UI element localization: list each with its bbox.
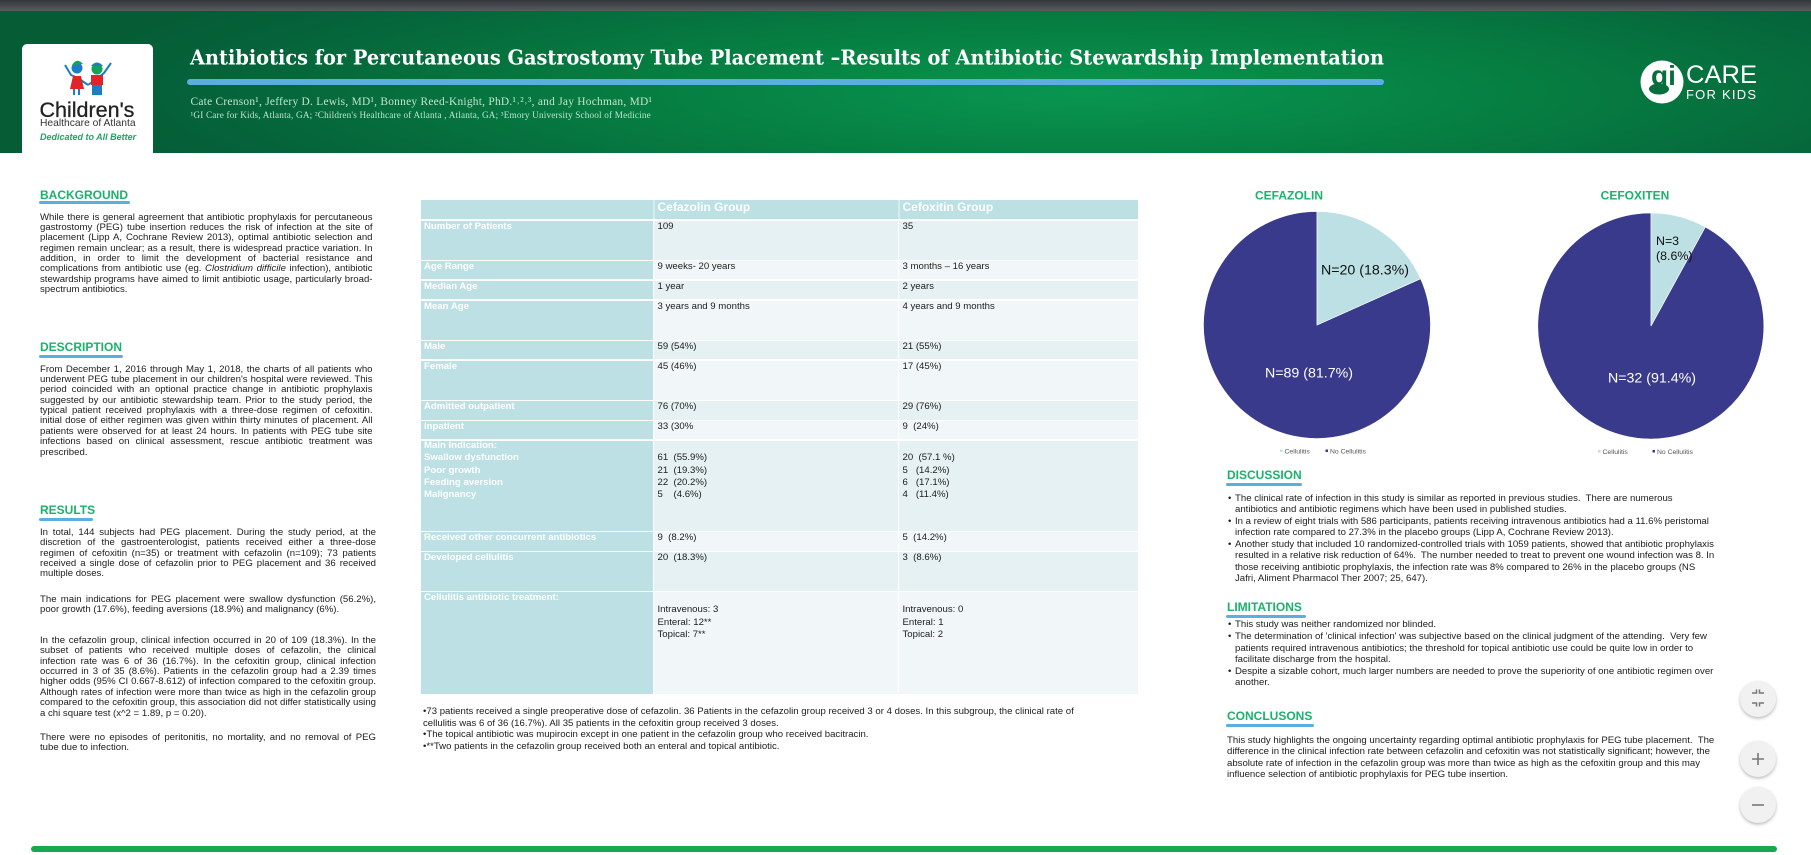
- row: cellulitis antibiotic treatment: Topical: 2: [902, 629, 943, 640]
- logo: GI Care for Kids: [1640, 60, 1757, 104]
- chart title: cefazolin: CEFAZOLIN: [1255, 188, 1323, 202]
- row: developed cellulitis: 3 (8.6%): [902, 552, 941, 562]
- row: inpatient: [421, 420, 1138, 439]
- heading: discussion: DISCUSSION: [1227, 468, 1302, 482]
- heading: results: RESULTS: [40, 503, 95, 517]
- text: limitations bullets: Despite a sizable cohort, much larger numbers are needed to prove the superiority of one antibiotic regimen over: [1235, 666, 1713, 677]
- row: developed cellulitis: 20 (18.3%): [658, 552, 707, 562]
- text: conclusions: This study highlights the ongoing uncertainty regarding optimal antibiotic prophylaxis for PEG tube placement. The: [1227, 735, 1714, 746]
- row: admitted outpatient: 76 (70%): [658, 401, 696, 412]
- panel: discussion: •: [1228, 493, 1231, 504]
- text: limitations bullets: another.: [1235, 677, 1270, 688]
- text: conclusions: influence selection of antibiotic prophylaxis for PEG tube insertion.: [1227, 769, 1508, 780]
- panel: discussion: •: [1228, 539, 1231, 550]
- slice label: cellulitis: N=3: [1656, 234, 1679, 248]
- slice label: no cellulitis: N=89 (81.7%): [1265, 366, 1353, 382]
- text: discussion bullets: The clinical rate of infection in this study is similar as reported in previous studies. There are numerous: [1235, 493, 1673, 504]
- text: discussion bullets: resulted in a relative risk reduction of 64%. The number needed to treat to prevent one wound infection was 8. In: [1235, 550, 1714, 561]
- legend: Cellulitis: [1602, 449, 1628, 456]
- chart: cefazolin pie: [1204, 188, 1430, 456]
- pie slice: cellulitis: [1651, 213, 1705, 326]
- panel: limitations: [1226, 600, 1714, 688]
- header banner: [0, 11, 1811, 153]
- authors: Cate Crenson¹, Jeffery D. Lewis, MD¹, Bonney Reed-Knight, PhD.¹˒²˒³, and Jay Hochman, MD¹: [190, 96, 652, 108]
- row: admitted outpatient: 29 (76%): [902, 401, 941, 412]
- text: results paragraph 1: multiple doses.: [40, 568, 104, 579]
- top dark browser bar: [0, 0, 1811, 11]
- chart: cefoxitin pie: [1538, 188, 1764, 456]
- table header row: Cefoxitin Group: [902, 200, 993, 214]
- text: limitations bullets: patients required intravenous antibiotics; the threshold for topical antibiotic use could be quite low in order to: [1235, 643, 1693, 654]
- row: male: 59 (54%): [658, 340, 696, 352]
- row: number of patients: 35: [902, 220, 913, 232]
- row: number of patients: Number of Patients: [424, 220, 512, 232]
- panel: limitations: •: [1228, 619, 1231, 630]
- table footnotes: •The topical antibiotic was mupirocin except in one patient in the cefazolin group who received bacitracin.: [423, 729, 868, 740]
- text: discussion bullets: In a review of eight trials with 586 participants, patients receiving intravenous antibiotics had a 11.6% peristomal: [1235, 516, 1709, 527]
- text: discussion bullets: infection rate compared to 27.3% in the placebo groups (Lipp A, Cochrane Review 2013).: [1235, 527, 1614, 538]
- text: discussion bullets: antibiotics and antibiotic regimens which have been used in published studies.: [1235, 504, 1567, 515]
- legend: Cellulitis: [1284, 448, 1310, 456]
- text: results paragraph 2: [40, 594, 376, 615]
- heading: limitations: LIMITATIONS: [1227, 600, 1302, 614]
- row: main indication: 5 (4.6%): [658, 489, 702, 500]
- title underline: [187, 79, 1384, 85]
- row: main indication: 6 (17.1%): [902, 477, 949, 488]
- table footnotes: [423, 706, 1074, 752]
- row: median age: 2 years: [902, 280, 934, 292]
- row: age range: 3 months – 16 years: [902, 261, 989, 272]
- text: discussion bullets: those receiving antibiotic prophylaxis, the infection rate was 8% compared to 26% in the placebo groups (NS: [1235, 562, 1695, 573]
- row: cellulitis antibiotic treatment: Intravenous: 3: [658, 604, 718, 615]
- row: other concurrent antibiotics: Received other concurrent antibiotics: [424, 532, 596, 543]
- panel: results: [39, 503, 376, 753]
- logo: GI Care for Kids: gi: [1651, 60, 1676, 91]
- row: mean age: Mean Age: [424, 300, 469, 312]
- row: developed cellulitis: Developed cellulitis: [424, 552, 514, 562]
- row: developed cellulitis: [421, 552, 1138, 591]
- table header row: [421, 200, 1138, 218]
- pie slice: no cellulitis: [1538, 213, 1764, 439]
- row: main indication: 5 (14.2%): [902, 464, 949, 476]
- logo wordmark: Children's: [40, 98, 134, 122]
- panel: discussion: [1226, 468, 1714, 584]
- row: main indication: 22 (20.2%): [658, 477, 707, 488]
- logo: GI Care for Kids: CARE: [1686, 61, 1757, 89]
- row: main indication: 4 (11.4%): [902, 489, 949, 500]
- row: main indication: 20 (57.1 %): [902, 452, 955, 462]
- row: main indication: Poor growth: [424, 464, 480, 476]
- text: limitations bullets: [1228, 619, 1714, 688]
- chart title: cefoxiten: CEFOXITEN: [1601, 188, 1669, 202]
- row: cellulitis antibiotic treatment: Cellulitis antibiotic treatment:: [424, 592, 559, 603]
- row: inpatient: Inpatient: [424, 420, 464, 432]
- logo: GI Care for Kids: FOR KIDS: [1686, 87, 1756, 102]
- heading: conclusions: CONCLUSONS: [1227, 709, 1312, 723]
- row: main indication: Malignancy: [424, 489, 476, 500]
- text: discussion bullets: Another study that included 10 randomized-controlled trials with 1059 patients, showed that antibiotic prophylaxis: [1235, 539, 1714, 550]
- row: female: [421, 360, 1138, 400]
- table: patient characteristics: [421, 200, 1138, 694]
- row: main indication: 61 (55.9%): [658, 452, 707, 462]
- icon: two children holding hands: [64, 60, 112, 95]
- row: cellulitis antibiotic treatment: [421, 592, 1138, 694]
- row: mean age: [421, 300, 1138, 340]
- logo tagline: Dedicated to All Better: [40, 132, 136, 142]
- text: description: [40, 364, 372, 458]
- row: main indication: Swallow dysfunction: [424, 452, 519, 462]
- logo subline: Healthcare of Atlanta: [40, 118, 136, 129]
- pie slice: cellulitis: [1317, 212, 1421, 325]
- text: conclusions: difference in the clinical infection rate between cefazolin and cefoxitin was not statistically significant; however, the: [1227, 746, 1710, 757]
- legend: No Cellulitis: [1657, 449, 1693, 456]
- text: discussion bullets: [1228, 493, 1714, 584]
- row: median age: [421, 280, 1138, 299]
- row: median age: Median Age: [424, 280, 477, 292]
- panel: limitations: •: [1228, 666, 1231, 677]
- row: male: Male: [424, 340, 445, 352]
- button: zoom in: [1740, 741, 1776, 777]
- slice label: cellulitis: (8.6%): [1656, 249, 1692, 263]
- footer bar: [31, 846, 1777, 852]
- row: age range: [421, 261, 1138, 279]
- row: other concurrent antibiotics: [421, 532, 1138, 551]
- row: inpatient: 33 (30%: [658, 420, 693, 432]
- row: other concurrent antibiotics: 5 (14.2%): [902, 532, 947, 543]
- button: zoom out: [1740, 787, 1776, 823]
- row: male: [421, 340, 1138, 359]
- pie slice: no cellulitis: [1203, 212, 1430, 438]
- text: results paragraph 4: [40, 733, 376, 753]
- row: admitted outpatient: [421, 401, 1138, 420]
- panel: discussion: •: [1228, 516, 1231, 527]
- text: limitations bullets: The determination of 'clinical infection' was subjective based on the clinical judgment of the attending. Very few: [1235, 631, 1707, 642]
- row: main indication: Main Indication:: [424, 440, 497, 451]
- slice label: no cellulitis: N=32 (91.4%): [1608, 370, 1696, 386]
- table header row: Cefazolin Group: [658, 200, 750, 214]
- text: results paragraph 3: [40, 636, 376, 719]
- row: number of patients: 109: [658, 220, 674, 232]
- text: results paragraph 1: [40, 528, 376, 579]
- row: cellulitis antibiotic treatment: Enteral: 12**: [658, 617, 711, 628]
- text: results paragraph 2: poor growth (17.6%), feeding aversions (18.9%) and malignancy (6%).: [40, 604, 339, 615]
- row: main indication: 21 (19.3%): [658, 464, 707, 476]
- row: inpatient: 9 (24%): [902, 420, 939, 432]
- row: female: Female: [424, 360, 457, 372]
- text: results paragraph 4: tube due to infection.: [40, 742, 129, 753]
- text: background: [40, 212, 373, 295]
- table footnotes: •73 patients received a single preoperative dose of cefazolin. 36 Patients in the cefazolin group received 3 or 4 doses. In this subgroup, the clinical rate of: [423, 706, 1074, 717]
- text: results paragraph 3: a chi square test (x^2 = 1.89, p = 0.20).: [40, 708, 207, 719]
- row: other concurrent antibiotics: 9 (8.2%): [658, 532, 696, 543]
- affiliations: ¹GI Care for Kids, Atlanta, GA; ²Children's Healthcare of Atlanta , Atlanta, GA; ³Emory University School of Medicine: [190, 110, 651, 120]
- row: female: 45 (46%): [658, 360, 696, 372]
- slice label: cellulitis: [1656, 234, 1692, 263]
- panel: limitations: •: [1228, 631, 1231, 642]
- text: conclusions: absolute rate of infection in the cefazolin group was more than twice as high as the cefoxitin group and this may: [1227, 758, 1700, 769]
- legend: No Cellulitis: [1330, 448, 1366, 456]
- heading: description: DESCRIPTION: [40, 340, 122, 354]
- row: median age: 1 year: [658, 280, 684, 292]
- text: discussion bullets: Jafri, Aliment Pharmacol Ther 2007; 25, 647).: [1235, 573, 1428, 584]
- row: age range: Age Range: [424, 261, 474, 272]
- panel: description: [39, 340, 372, 458]
- logo: Children's Healthcare of Atlanta: [22, 44, 153, 153]
- row: female: 17 (45%): [902, 360, 941, 372]
- heading: background: BACKGROUND: [40, 188, 128, 202]
- text: limitations bullets: facilitate discharge from the hospital.: [1235, 654, 1391, 665]
- button: fit to screen: [1740, 681, 1776, 717]
- text: description: prescribed.: [40, 447, 87, 458]
- text: conclusions: [1227, 735, 1714, 780]
- table footnotes: •**Two patients in the cefazolin group received both an enteral and topical antibiotic.: [423, 741, 779, 752]
- row: cellulitis antibiotic treatment: Intravenous: 0: [902, 604, 963, 615]
- row: mean age: 4 years and 9 months: [902, 300, 995, 312]
- table footnotes: cellulitis was 6 of 36 (16.7%). All 35 patients in the cefoxitin group received 3 doses.: [423, 718, 779, 729]
- row: age range: 9 weeks- 20 years: [658, 261, 735, 272]
- legend: [1280, 448, 1366, 456]
- row: admitted outpatient: Admitted outpatient: [424, 401, 515, 412]
- row: cellulitis antibiotic treatment: Enteral: 1: [902, 617, 944, 628]
- row: main indication: Feeding aversion: [424, 477, 503, 488]
- text: limitations bullets: This study was neither randomized nor blinded.: [1235, 619, 1436, 630]
- text: background: spectrum antibiotics.: [40, 284, 127, 295]
- row: mean age: 3 years and 9 months: [658, 300, 750, 312]
- legend: [1598, 449, 1693, 456]
- panel: background: [39, 188, 373, 295]
- row: cellulitis antibiotic treatment: Topical: 7**: [658, 629, 706, 640]
- panel: conclusions: [1226, 709, 1714, 780]
- slice label: cellulitis: N=20 (18.3%): [1321, 262, 1409, 278]
- row: number of patients: [421, 220, 1138, 260]
- row: male: 21 (55%): [902, 340, 941, 352]
- row: main indication: [421, 440, 1138, 531]
